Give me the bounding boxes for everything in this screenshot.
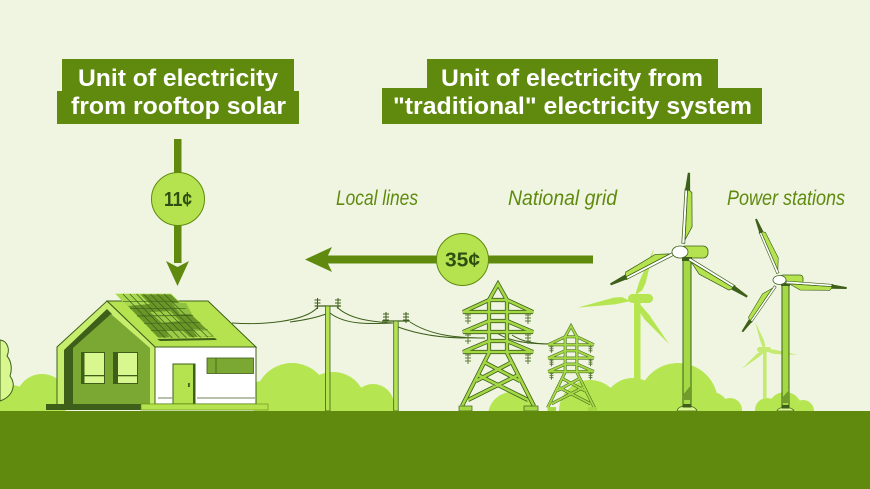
pylon large xyxy=(459,284,538,411)
solar panel xyxy=(116,294,217,341)
arrow: down to house with 11 cents: 11¢ xyxy=(164,189,192,211)
label: local lines: Local lines xyxy=(336,187,418,210)
ground xyxy=(0,411,870,489)
door xyxy=(173,364,195,404)
side window xyxy=(207,358,254,374)
wind turbine small xyxy=(738,217,847,411)
title: traditional electricity system xyxy=(382,59,762,124)
house xyxy=(46,294,268,410)
skirting lines xyxy=(158,397,255,399)
arrow: leftward with 35 cents xyxy=(305,234,593,286)
utility pole 1 xyxy=(314,298,341,411)
roof xyxy=(107,301,256,347)
pylon small xyxy=(548,326,597,411)
utility pole 2 xyxy=(382,312,410,411)
label: national grid: National grid xyxy=(508,187,618,210)
base xyxy=(46,404,141,410)
gable outer xyxy=(57,301,155,405)
wind turbine large xyxy=(607,173,749,411)
title: rooftop solar: from rooftop solar xyxy=(71,93,286,120)
background wind turbine large xyxy=(577,248,671,380)
arrow: down to house with 11 cents xyxy=(152,139,204,286)
power lines xyxy=(232,307,550,344)
bush at left edge xyxy=(0,340,13,401)
label: power stations: Power stations xyxy=(727,187,845,210)
title: rooftop solar: Unit of electricity xyxy=(78,65,279,92)
background wind turbine small xyxy=(740,321,798,399)
title: rooftop solar xyxy=(57,59,299,124)
white wall xyxy=(155,347,256,404)
arrow: leftward with 35 cents: 35¢ xyxy=(445,250,480,272)
title: traditional electricity system: Unit of electricity from xyxy=(441,65,703,92)
front windows xyxy=(81,352,105,384)
background hills xyxy=(0,363,814,443)
title: traditional electricity system: "traditional" electricity system xyxy=(393,93,752,120)
